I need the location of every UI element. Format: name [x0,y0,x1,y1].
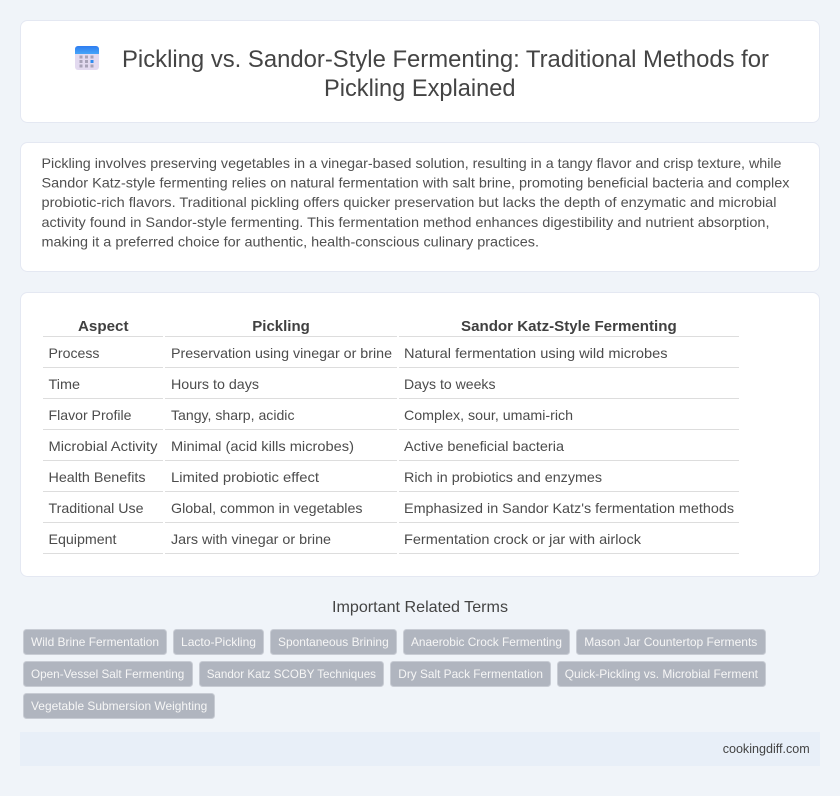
row: Health Benefits: Limited probiotic effect [171,469,319,485]
tag: Spontaneous Brining: Spontaneous Brining [278,635,389,649]
text block: summary [42,155,790,249]
title: Pickling Explained [324,75,516,102]
tag: Quick-Pickling vs. Microbial Ferment: Quick-Pickling vs. Microbial Ferment [565,667,759,681]
tag: Wild Brine Fermentation [24,630,166,654]
tag: Dry Salt Pack Fermentation [390,662,550,686]
tag: Open-Vessel Salt Fermenting [24,662,192,686]
tag: Dry Salt Pack Fermentation: Dry Salt Pack Fermentation [398,667,543,681]
row: Traditional Use [43,500,739,523]
row: Equipment: Jars with vinegar or brine [171,531,331,547]
title: Pickling vs. Sandor-Style Fermenting: Traditional Methods for [122,46,769,73]
panel: related term tags [24,630,766,718]
row: Traditional Use: Global, common in vegetables [171,500,362,516]
row: Health Benefits: Rich in probiotics and enzymes [404,469,602,485]
tag: Sandor Katz SCOBY Techniques: Sandor Katz SCOBY Techniques [207,667,376,681]
row: Equipment: Fermentation crock or jar with airlock [404,531,642,547]
table header: Pickling [252,318,310,335]
table header [43,318,739,337]
icon: calendar [75,46,99,70]
tag: Anaerobic Crock Fermenting [404,630,570,654]
row: Time: Days to weeks [404,376,496,392]
text block: summary: Pickling involves preserving vegetables in a vinegar-based solution, resulting in a tangy flavor and crisp texture, while [42,155,782,171]
footer [20,732,820,766]
row: Microbial Activity [43,438,739,461]
text block: summary: probiotic-rich flavors. Traditional pickling offers quicker preservation but lacks the depth of enzymatic and microbial [42,194,777,210]
row: Traditional Use: Emphasized in Sandor Katz's fermentation methods [404,500,734,516]
row: Health Benefits: Health Benefits [48,469,146,485]
row: Time [43,376,739,399]
tag: Open-Vessel Salt Fermenting: Open-Vessel Salt Fermenting [31,667,184,681]
row: Process: Process [48,345,100,361]
tag: Wild Brine Fermentation: Wild Brine Fermentation [31,635,159,649]
footer: cookingdiff.com [723,741,810,756]
row: Time: Hours to days [171,376,259,392]
row: Equipment: Equipment [48,531,117,547]
tag: Sandor Katz SCOBY Techniques [200,662,384,686]
title [122,46,769,102]
row: Traditional Use: Traditional Use [48,500,144,516]
text block: summary: activity found in Sandor-style fermenting. This fermentation method enhances digestibility and nutrient absorption, [42,214,770,230]
row: Health Benefits [43,469,739,492]
tag: Lacto-Pickling: Lacto-Pickling [181,635,256,649]
tag: Vegetable Submersion Weighting: Vegetable Submersion Weighting [31,699,207,713]
row: Flavor Profile: Tangy, sharp, acidic [171,407,294,423]
tag: Quick-Pickling vs. Microbial Ferment [558,662,766,686]
tag: Spontaneous Brining [270,630,396,654]
row: Microbial Activity: Microbial Activity [48,438,158,454]
panel: summary paragraph [20,142,820,272]
table header: Sandor Katz-Style Fermenting [461,318,677,335]
tag: Mason Jar Countertop Ferments: Mason Jar Countertop Ferments [584,635,757,649]
text block: summary: making it a preferred choice for authentic, health-conscious culinary practices. [42,233,539,249]
panel: comparison table [20,292,820,576]
row: Time: Time [48,376,80,392]
row: Microbial Activity: Active beneficial bacteria [404,438,564,454]
tag: Mason Jar Countertop Ferments [576,630,766,654]
row: Flavor Profile [43,407,739,430]
tag: Lacto-Pickling [174,630,264,654]
row: Microbial Activity: Minimal (acid kills microbes) [171,438,354,454]
row: Equipment [43,531,739,554]
tag: Anaerobic Crock Fermenting: Anaerobic Crock Fermenting [411,635,562,649]
heading: related terms: Important Related Terms [332,599,508,616]
row: Process: Natural fermentation using wild microbes [404,345,668,361]
panel: title header [20,20,820,122]
table header: Aspect [78,318,128,335]
text block: summary: Sandor Katz-style fermenting relies on natural fermentation with salt brine, promoting beneficial bacteria and complex [42,175,790,191]
row: Process [43,345,739,368]
tag: Vegetable Submersion Weighting [24,694,214,718]
row: Process: Preservation using vinegar or brine [171,345,392,361]
row: Flavor Profile: Complex, sour, umami-rich [404,407,573,423]
row: Flavor Profile: Flavor Profile [48,407,132,423]
